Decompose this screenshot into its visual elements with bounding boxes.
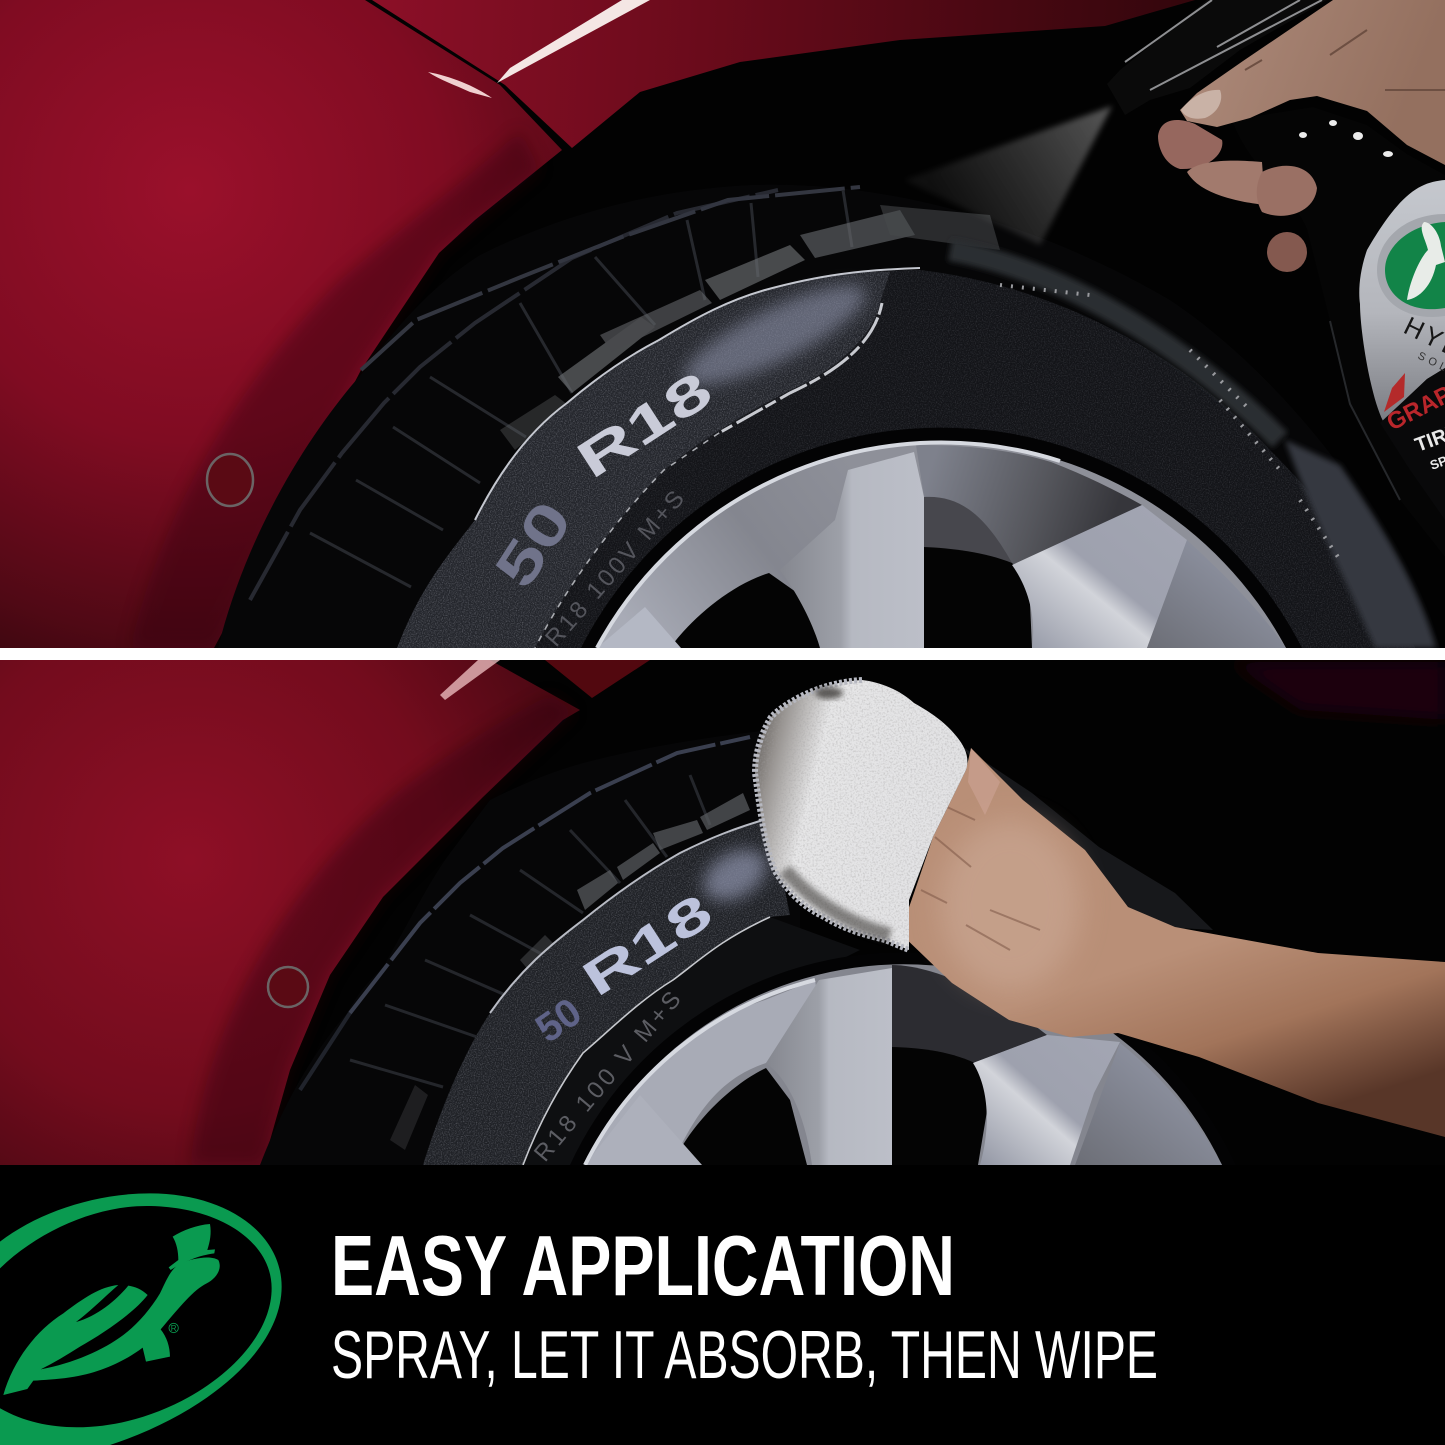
arm shape — [900, 748, 1445, 1137]
right spoke lower photo — [973, 1035, 1120, 1165]
spray trigger head — [1107, 0, 1327, 115]
wheel opening center — [924, 547, 1032, 648]
bottom photo panel: wiping the tire — [0, 660, 1445, 1167]
pad lower smudge — [785, 870, 890, 935]
central spoke lower photo — [766, 968, 892, 1165]
label logo silver ring — [1377, 214, 1445, 317]
bottom brand banner — [0, 1165, 1445, 1445]
sidewall second line — [535, 433, 719, 648]
finger creases — [921, 807, 1040, 950]
wipe edge smear — [719, 303, 882, 433]
rim inner dark — [924, 497, 1012, 563]
bottle body — [1232, 107, 1445, 557]
shoulder highlight lower photo — [490, 818, 770, 1013]
alloy wheel rim lower photo — [585, 964, 1222, 1165]
right tire lit band — [950, 250, 1280, 440]
heading: EASY APPLICATION — [331, 1219, 955, 1314]
sidewall grain lower photo — [423, 818, 790, 1165]
right rim panel lower photo — [1075, 1043, 1222, 1165]
rim upper right panel — [916, 445, 1142, 565]
index finger — [1158, 120, 1222, 169]
body highlights — [497, 0, 650, 83]
fender crease shading — [130, 130, 540, 648]
red fender lower photo — [0, 660, 580, 1165]
tire behind hand — [960, 745, 1213, 930]
applicator pad — [755, 680, 967, 950]
shoulder highlight line — [475, 268, 920, 520]
top photo panel: spraying the tire — [0, 0, 1445, 652]
lit tread patches lower photo — [390, 793, 750, 1150]
bottle edge reflection — [1330, 321, 1400, 500]
turtle body — [3, 1258, 220, 1395]
fender highlight — [428, 72, 492, 98]
trigger highlight lines — [1125, 0, 1322, 90]
spray bottle — [1299, 120, 1445, 500]
red upper body panel — [372, 0, 1195, 148]
label new badge — [1384, 373, 1405, 412]
right tire droplets — [1000, 285, 1340, 560]
label logo green — [1385, 222, 1445, 309]
registered mark — [169, 1323, 178, 1333]
tire outer ribs lower photo — [300, 737, 750, 1090]
inner sidewall lower photo — [523, 917, 860, 1165]
rim barrel — [597, 442, 1286, 648]
distant red glow — [1230, 662, 1445, 720]
tire lower photo — [260, 730, 800, 1165]
second line lower photo — [523, 917, 770, 1165]
right spoke — [1012, 505, 1187, 648]
tire number lower photo: 50 — [528, 990, 590, 1051]
sidewall base — [536, 270, 1378, 648]
wheel opening left — [670, 573, 823, 648]
red car fender — [0, 0, 562, 648]
bottle label — [1359, 180, 1445, 421]
rim barrel lower photo — [585, 964, 1222, 1165]
middle finger — [1187, 161, 1265, 205]
finger tip highlight — [968, 748, 1000, 815]
left spoke — [597, 607, 681, 648]
alloy wheel rim — [597, 442, 1286, 648]
sidewall lower photo — [423, 818, 790, 1165]
bottle shoulder highlights — [1299, 120, 1393, 157]
tire size number 50: 50 — [482, 490, 585, 599]
rim inner dark lower photo — [892, 965, 1047, 1063]
logo oval ring — [0, 1193, 282, 1445]
registered mark: R — [171, 1324, 177, 1333]
wheel opening left lower photo — [672, 1068, 807, 1165]
right rim panel — [1147, 540, 1286, 648]
rim lip — [597, 443, 1060, 648]
rim lip lower photo — [585, 980, 815, 1165]
pad terry texture — [755, 680, 967, 950]
sidewall grain — [397, 272, 890, 648]
tread block grooves — [310, 190, 852, 587]
tread block grooves lower photo — [350, 775, 710, 1087]
thumb crease — [1245, 30, 1445, 90]
tire fine print: R18 100V M+S — [540, 483, 692, 652]
fender highlight lower photo — [440, 660, 500, 700]
pad body — [755, 680, 967, 950]
red upper panel lower photo — [545, 660, 650, 698]
hand back and thumb — [1180, 0, 1445, 165]
tire outer ribs — [250, 187, 860, 600]
wet sheen patch — [678, 277, 872, 393]
left spoke lower photo — [585, 1095, 702, 1165]
wheel black ring — [581, 428, 1302, 648]
hand highlight — [940, 820, 1080, 990]
white divider between photos — [0, 648, 1445, 660]
wheel black ring lower photo — [570, 952, 1236, 1165]
rim lit barrel left lower photo — [585, 980, 820, 1165]
arm and hand — [900, 748, 1445, 1137]
label dark banner — [1380, 368, 1445, 520]
central spoke — [780, 452, 924, 648]
turtle top hat — [169, 1224, 215, 1270]
parking sensor lower photo — [268, 967, 308, 1007]
logo: green oval with turtle — [0, 1193, 282, 1445]
parking sensor — [207, 454, 253, 506]
ring finger — [1257, 166, 1317, 216]
tire — [222, 381, 356, 634]
tire lettering lower photo: R18 — [572, 883, 722, 1007]
spray mist — [905, 106, 1112, 245]
hand holding trigger — [1158, 0, 1445, 272]
tire fine print lower photo: R18 100 V M+S — [529, 985, 688, 1167]
sidewall textured band — [397, 272, 890, 648]
pad fringe — [755, 680, 909, 950]
sidewall base grain — [536, 270, 1414, 648]
label turtle mark — [1407, 222, 1445, 300]
wheel opening center lower photo — [892, 1047, 990, 1165]
pinky — [1267, 232, 1307, 272]
right sidewall lit strip — [1285, 440, 1436, 648]
lit tread patches — [500, 205, 1000, 450]
fender crease lower photo — [190, 695, 575, 1165]
tire size lettering: R18 — [567, 361, 723, 490]
thumbnail — [1181, 90, 1221, 119]
wet sheen lower photo — [695, 839, 775, 911]
pad top smudge — [815, 687, 843, 699]
